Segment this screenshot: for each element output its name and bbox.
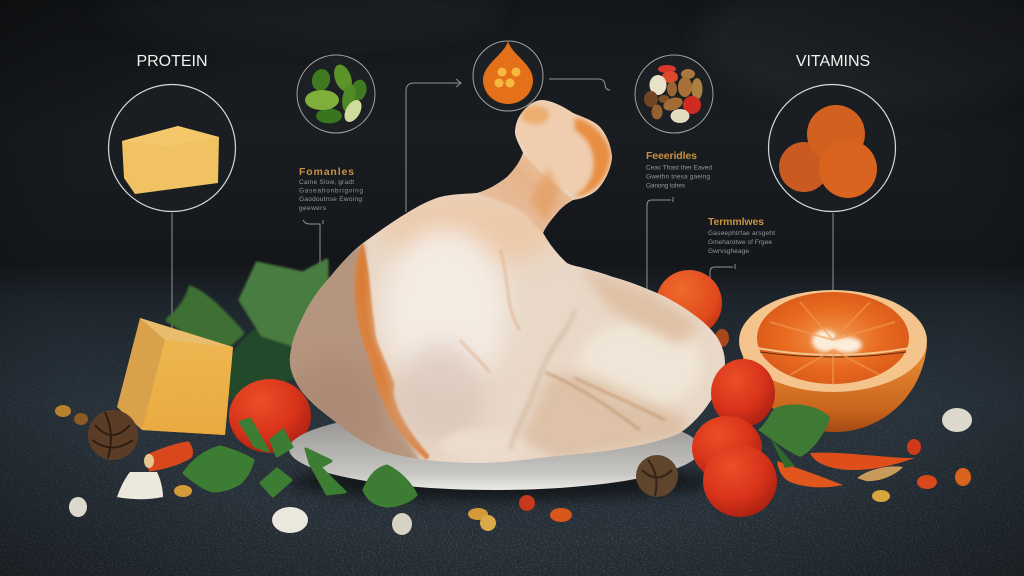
icon: nuts and berries: [635, 55, 713, 133]
icon: green leaves: [297, 55, 375, 133]
text block: upper right label: Ganong tohes: [646, 182, 686, 190]
food: small scattered pieces: [55, 405, 972, 535]
upper thigh warm tone: [380, 194, 560, 266]
lower centre pink tone: [395, 345, 485, 445]
food: plate: [289, 408, 710, 500]
text block: left label: Came Slow, gradt: [299, 179, 354, 186]
knob orange edge: [570, 118, 610, 198]
food: tomato left: [229, 379, 311, 453]
text block: left label: Gaodoutnse Ewoing: [299, 196, 362, 203]
text block: lower right label: Termmlwes: [708, 216, 764, 228]
food: halved orange in bowl: [739, 290, 927, 432]
text block: left label: Fomanles: [299, 166, 354, 178]
left flank shadow: [290, 243, 422, 460]
food: herbs behind chicken: [167, 260, 327, 400]
connector lines: [172, 79, 833, 345]
heading: protein: PROTEIN: [136, 53, 208, 70]
icon: protein circle with cheese: [108, 84, 236, 212]
food: cheese block: [117, 318, 233, 435]
text block: upper right label: Ceac Thast ther Eaved: [646, 164, 712, 172]
text block: left label: geewers: [299, 205, 327, 212]
drumstick knob: [515, 100, 612, 198]
crease folds: [510, 310, 575, 450]
text block: lower right label: Gaseephtrfae arsgeht: [708, 230, 775, 237]
food: parsley bottom left: [184, 419, 416, 506]
food: tomato behind chicken: [656, 270, 729, 347]
text block: upper right label: Gwethn tnesa gaeing: [646, 174, 710, 180]
centre highlight: [383, 228, 507, 392]
food: tomatoes right: [692, 359, 777, 517]
text block: upper right label: [646, 150, 712, 190]
icon: vitamins circle with orange spheres: [768, 84, 896, 212]
food: basil and chili right: [758, 405, 915, 487]
text block: left label: Gaseahonbrigving: [299, 188, 363, 194]
icon: orange droplet: [473, 41, 543, 111]
seared orange band: [357, 250, 428, 458]
background wall: [0, 0, 1024, 270]
text block: left label: [299, 166, 363, 212]
text block: lower right label: Gwrvsgheage: [708, 248, 749, 255]
food: walnuts: [88, 410, 678, 497]
heading: vitamins: VITAMINS: [796, 53, 870, 70]
text block: lower right label: [708, 216, 775, 255]
right lobe: [580, 324, 700, 404]
drumstick shank: [477, 153, 573, 233]
chicken leg: [290, 100, 725, 463]
text block: upper right label: Feeeridles: [646, 150, 697, 162]
text block: lower right label: Gmeharotwe of Frgee: [708, 239, 772, 246]
